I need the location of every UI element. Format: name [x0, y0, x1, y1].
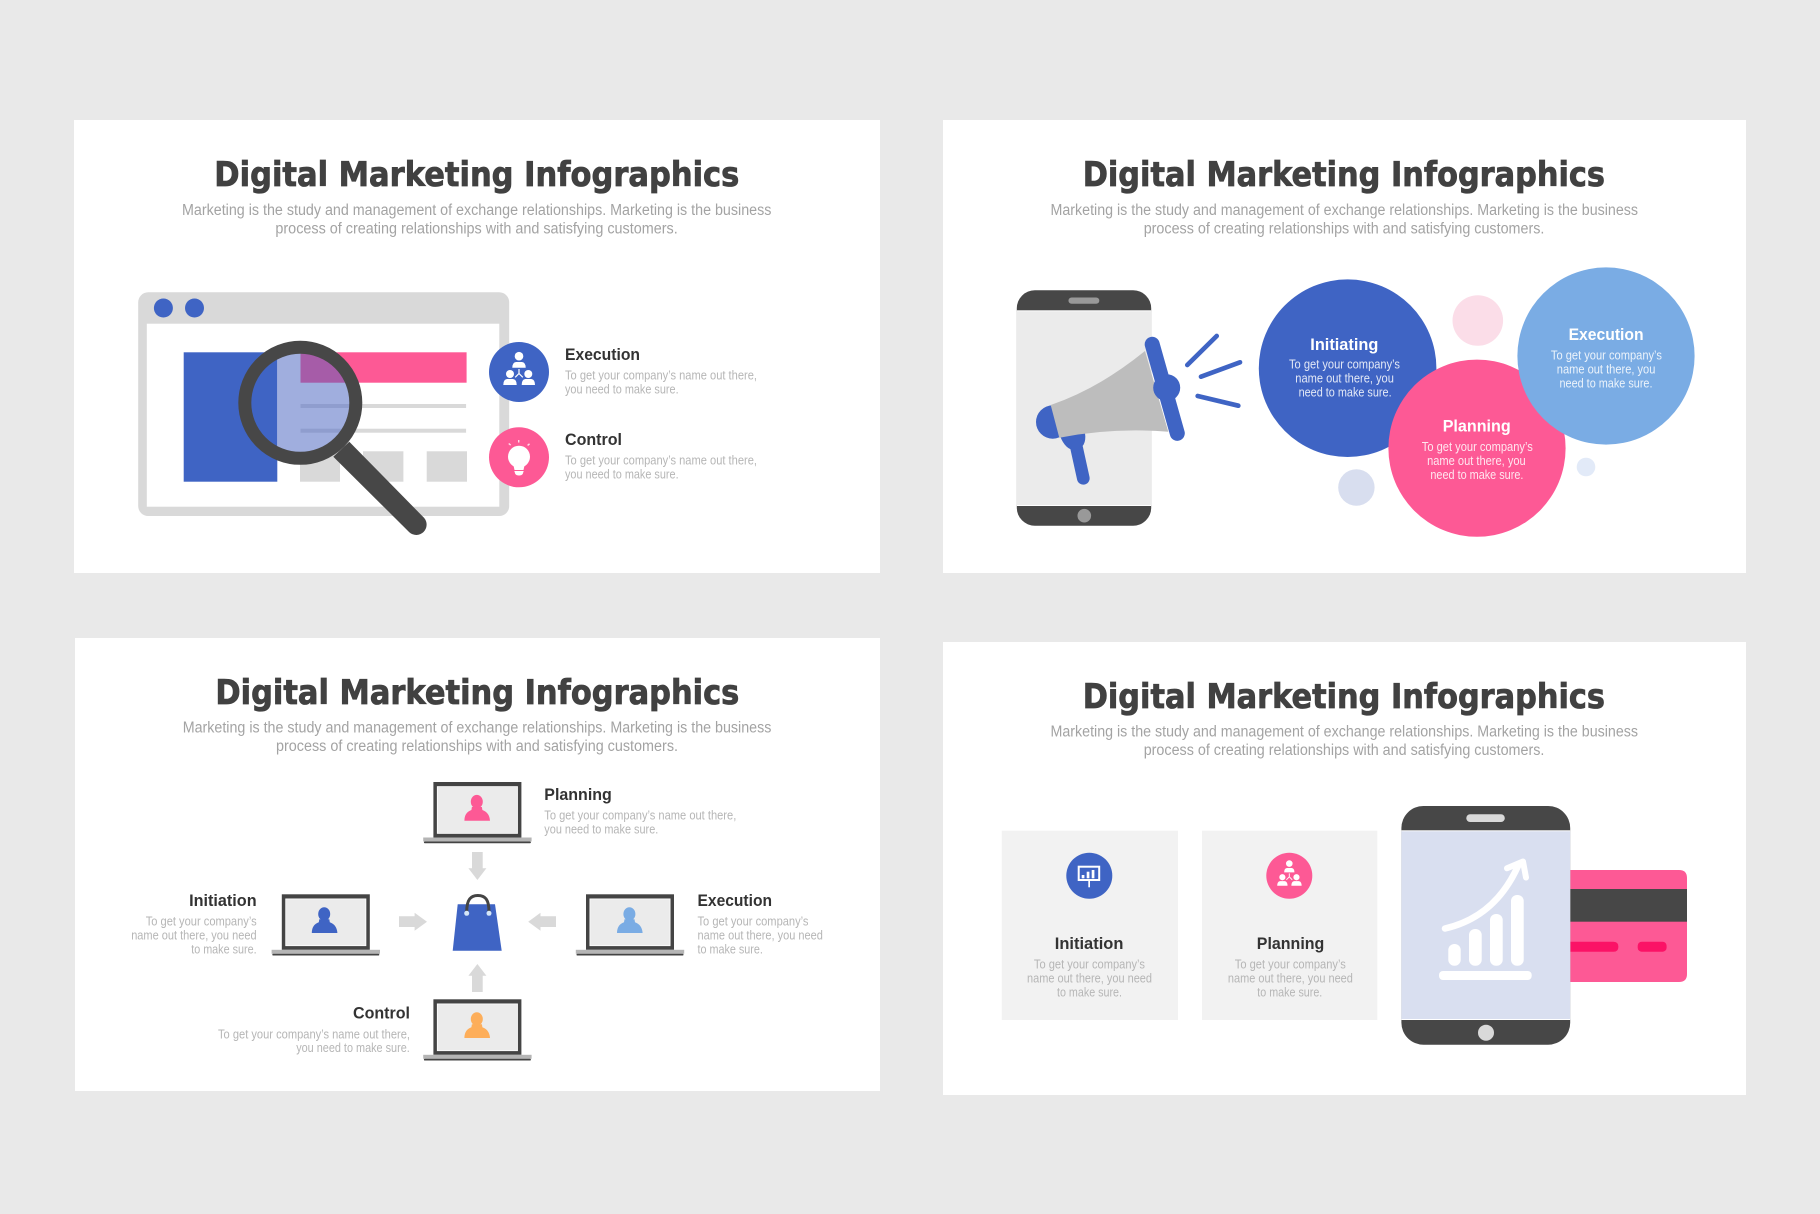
- decorative bubbles: [1338, 295, 1595, 506]
- text: planning: you need to make sure.: [544, 822, 658, 836]
- panel: browser search slide: [74, 120, 880, 573]
- card: planning: To get your company’s: [1235, 957, 1346, 971]
- card: initiation: name out there, you need: [1027, 971, 1152, 985]
- circle: initiating: need to make sure.: [1299, 386, 1392, 400]
- text: execution description: [565, 368, 757, 396]
- text: initiation: [131, 892, 257, 956]
- icon: credit card: [1570, 870, 1687, 982]
- subtitle: [1050, 724, 1638, 759]
- text: execution description: To get your company’s name out there,: [565, 368, 757, 382]
- card: initiation: To get your company’s: [1034, 957, 1145, 971]
- subtitle: process of creating relationships with and satisfying customers.: [1144, 220, 1544, 237]
- subtitle: Marketing is the study and management of exchange relationships. Marketing is the business: [1050, 202, 1638, 219]
- text: control: you need to make sure.: [296, 1041, 410, 1055]
- text: execution: name out there, you need: [698, 928, 823, 942]
- icon: team hierarchy: [1266, 853, 1312, 899]
- text: execution: to make sure.: [698, 942, 763, 956]
- subtitle: Marketing is the study and management of exchange relationships. Marketing is the business: [182, 202, 772, 219]
- circle: execution: name out there, you: [1557, 362, 1655, 376]
- card: initiation: to make sure.: [1057, 985, 1122, 999]
- subtitle: process of creating relationships with and satisfying customers.: [275, 220, 678, 237]
- subtitle: [183, 720, 772, 755]
- icon: magnifying glass: [245, 345, 427, 535]
- title: Digital Marketing Infographics: [1083, 677, 1605, 717]
- text: planning: Planning: [544, 786, 612, 804]
- laptop: planning: [423, 782, 532, 843]
- text: execution: To get your company’s: [698, 915, 808, 929]
- text: control: [218, 1004, 410, 1055]
- circle: execution: need to make sure.: [1560, 376, 1652, 390]
- text: control description: you need to make sure.: [565, 467, 679, 481]
- icon: phone: [1017, 290, 1151, 526]
- card: initiation: [1002, 831, 1178, 1020]
- circle: initiating: Initiating: [1310, 336, 1378, 354]
- circle: initiating: To get your company’s: [1289, 358, 1400, 372]
- icon: megaphone: [1036, 336, 1240, 478]
- text: control description: [565, 453, 757, 481]
- heading: control: Control: [565, 431, 622, 449]
- circle: execution: Execution: [1569, 326, 1644, 344]
- circle: planning: To get your company’s: [1422, 440, 1533, 454]
- subtitle: Marketing is the study and management of exchange relationships. Marketing is the business: [1050, 724, 1638, 741]
- arrow: down from planning: [468, 852, 486, 880]
- text: planning: [544, 786, 736, 836]
- browser window: [138, 292, 509, 516]
- text: control description: To get your company’s name out there,: [565, 453, 757, 467]
- card: planning: to make sure.: [1257, 985, 1322, 999]
- laptop: control: [423, 999, 532, 1060]
- laptop: initiation: [272, 894, 380, 956]
- card: planning: name out there, you need: [1228, 971, 1353, 985]
- title: Digital Marketing Infographics: [214, 155, 739, 195]
- text: initiation: to make sure.: [191, 942, 257, 956]
- card: planning: Planning: [1257, 935, 1324, 953]
- laptop: execution: [576, 894, 684, 956]
- arrow: left from execution: [528, 913, 556, 931]
- circle: initiating: name out there, you: [1295, 372, 1394, 386]
- heading: execution: Execution: [565, 346, 640, 364]
- arrow: right from initiation: [399, 913, 427, 931]
- subtitle: [182, 202, 772, 237]
- text: control: To get your company’s name out there,: [218, 1027, 410, 1041]
- circle: planning: Planning: [1443, 418, 1511, 436]
- panel: mobile payment slide: [943, 642, 1746, 1095]
- text: execution: [698, 892, 823, 956]
- circle: planning: need to make sure.: [1430, 468, 1523, 482]
- text: execution description: you need to make sure.: [565, 382, 679, 396]
- text: execution: Execution: [698, 892, 772, 910]
- text: initiation: To get your company’s: [146, 915, 257, 929]
- subtitle: process of creating relationships with and satisfying customers.: [276, 738, 678, 755]
- icon: control light bulb: [489, 427, 549, 487]
- circle: execution: To get your company’s: [1551, 348, 1662, 362]
- circle: planning: name out there, you: [1427, 454, 1526, 468]
- panel: laptops slide: [75, 638, 880, 1091]
- subtitle: [1050, 202, 1638, 237]
- circle: execution: [1517, 267, 1695, 445]
- chart: rising bars and arrow: [1439, 862, 1532, 980]
- subtitle: process of creating relationships with and satisfying customers.: [1144, 742, 1544, 759]
- icon: shopping bag: [453, 896, 502, 951]
- text: initiation: name out there, you need: [131, 928, 257, 942]
- panel: megaphone slide: [943, 120, 1746, 573]
- card: initiation: Initiation: [1055, 935, 1123, 953]
- title: Digital Marketing Infographics: [215, 673, 739, 713]
- title: Digital Marketing Infographics: [1083, 155, 1605, 195]
- text: planning: To get your company’s name out there,: [544, 808, 736, 822]
- arrow: up from control: [468, 964, 486, 992]
- circle: planning: [1388, 360, 1566, 537]
- subtitle: Marketing is the study and management of exchange relationships. Marketing is the business: [183, 720, 772, 737]
- icon: presentation board: [1066, 853, 1112, 899]
- icon: phone with growth chart: [1401, 806, 1570, 1045]
- circle: initiating: [1259, 279, 1436, 457]
- card: planning: [1202, 831, 1377, 1020]
- text: initiation: Initiation: [189, 892, 257, 910]
- text: control: Control: [353, 1004, 410, 1022]
- icon: execution team: [489, 342, 549, 402]
